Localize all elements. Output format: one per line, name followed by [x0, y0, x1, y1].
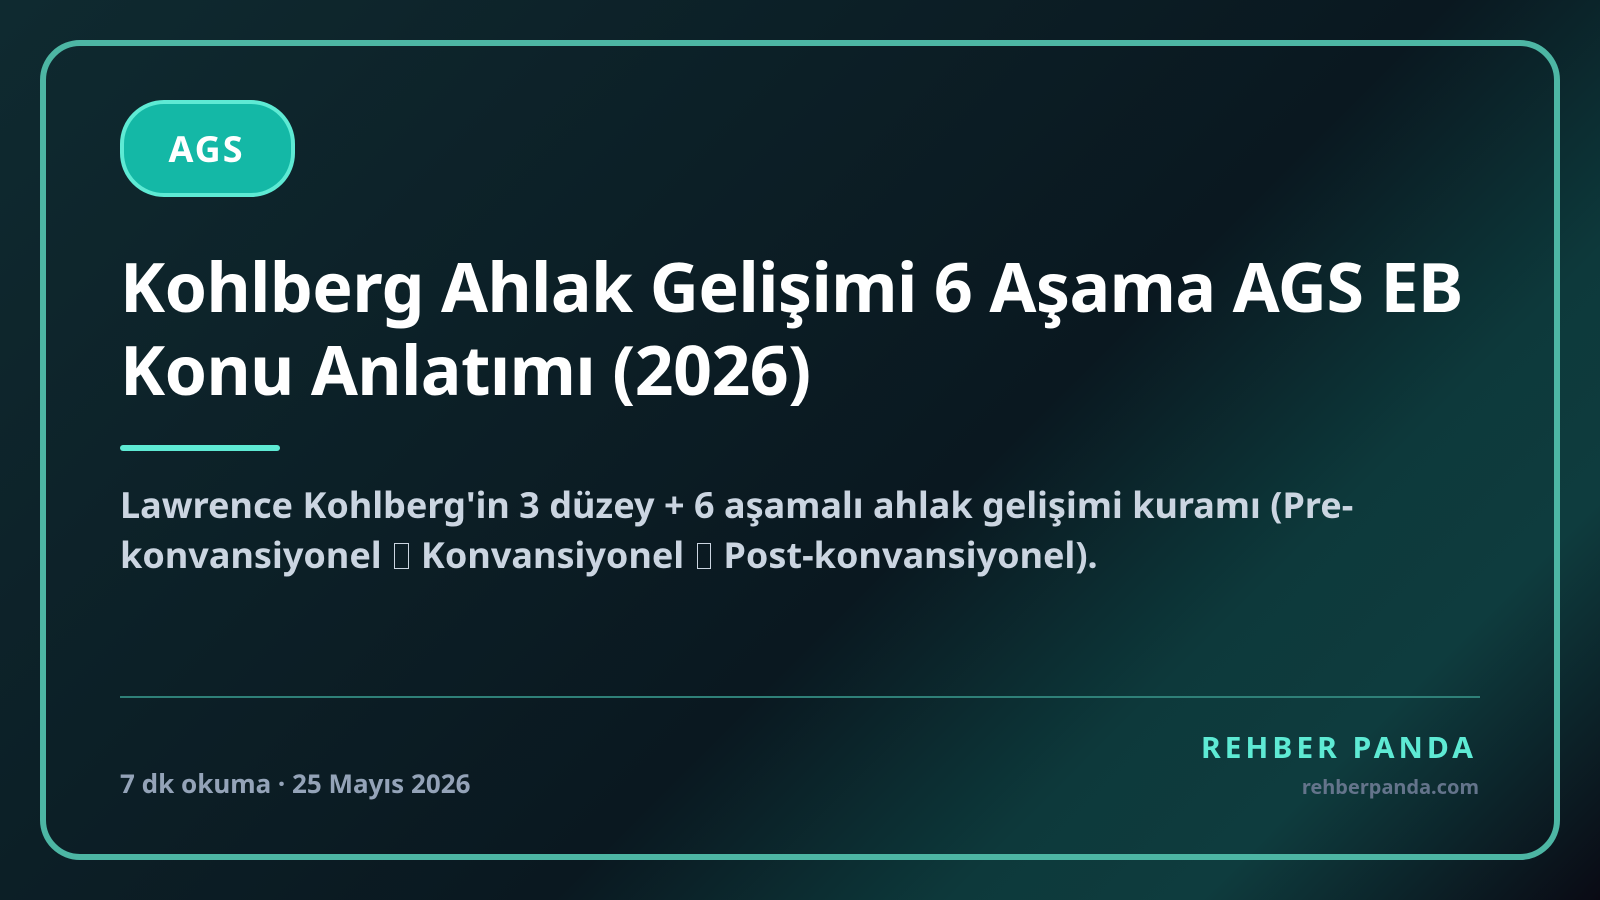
subtitle: konvansiyonel Konvansiyonel Post-konvansiyonel). [120, 530, 1098, 579]
brand url: rehberpanda.com [1302, 773, 1479, 800]
title: Kohlberg Ahlak Gelişimi 6 Aşama AGS EB [120, 239, 1463, 332]
badge: AGS: AGS [168, 124, 245, 173]
badge: AGS [120, 100, 295, 197]
title [120, 239, 1463, 415]
title: Konu Anlatımı (2026) [120, 322, 811, 415]
footer rule [120, 696, 1480, 698]
subtitle [120, 480, 1353, 579]
accent bar [120, 445, 280, 451]
brand name: REHBER PANDA [1201, 726, 1477, 767]
reading time and date: 7 dk okuma · 25 Mayıs 2026 [120, 765, 470, 801]
subtitle: Lawrence Kohlberg'in 3 düzey + 6 aşamalı ahlak gelişimi kuramı (Pre- [120, 480, 1353, 529]
